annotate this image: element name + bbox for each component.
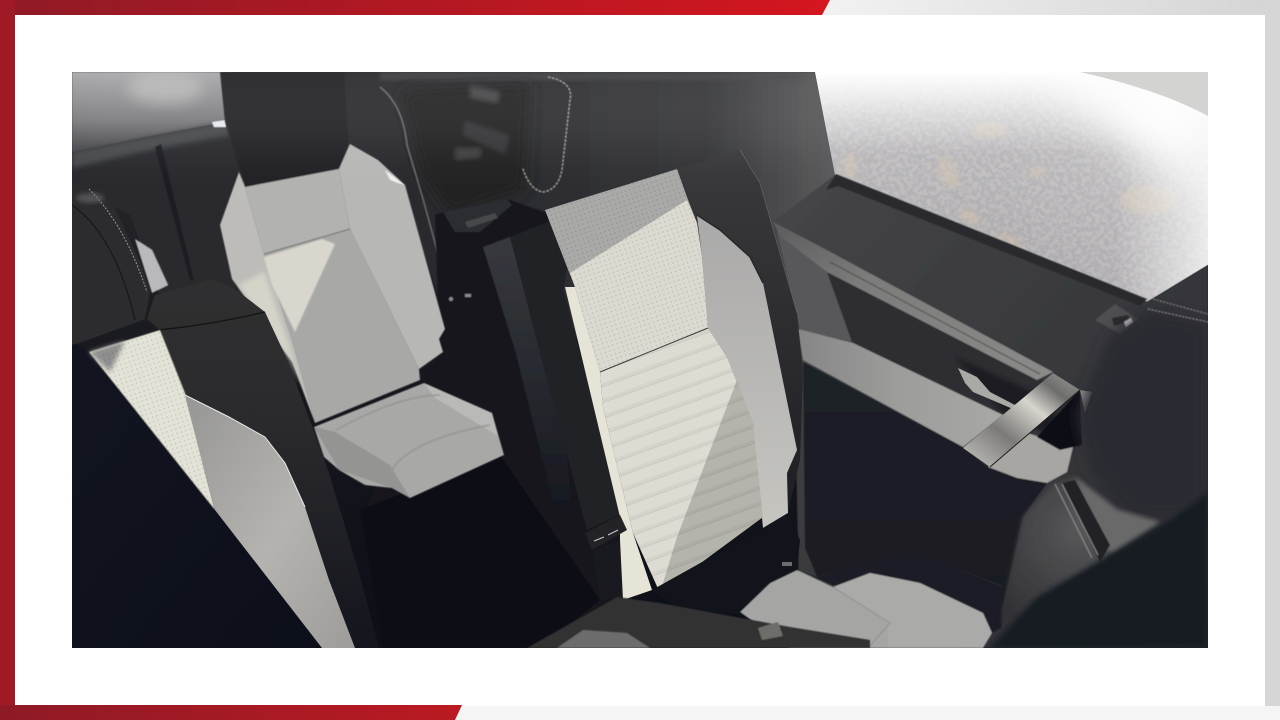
frame: grey right bar (1265, 0, 1280, 720)
white bolster (185, 395, 355, 648)
dark outer shell (728, 161, 803, 512)
headrest (220, 72, 350, 187)
door handle silver (958, 368, 1092, 467)
bottom right cushion (740, 550, 1003, 648)
seat side (1002, 477, 1160, 627)
front right seat (990, 299, 1208, 648)
upper back panel (245, 169, 350, 254)
bottom centre console (527, 597, 870, 648)
stitched dash curve (523, 77, 571, 192)
gravel speckle (828, 127, 1168, 301)
far rear seat (220, 72, 504, 498)
large dark foreground (1077, 309, 1208, 520)
door upper band (773, 222, 1053, 380)
quilted lower panel (600, 328, 763, 593)
perforated panel (89, 330, 215, 510)
frame: pale bottom bar (450, 706, 1280, 720)
photo base (72, 72, 1208, 648)
frame: red bottom bar (0, 705, 462, 720)
seat stitch stripe (1062, 480, 1110, 562)
tan patches (843, 122, 1180, 250)
soft light haze over photo top (60, 60, 840, 150)
seat cushion (314, 383, 504, 498)
door panel (773, 174, 1208, 648)
frame: red left bar (0, 0, 15, 720)
centre console and belt (360, 199, 576, 567)
door switch (1095, 304, 1138, 334)
roof wedge (1080, 72, 1208, 116)
bright left strip (565, 287, 652, 600)
door armrest end (988, 433, 1073, 483)
door recess (828, 273, 1074, 430)
front left seat (72, 184, 379, 648)
seatbelt (510, 210, 623, 530)
dark base (72, 342, 322, 648)
door armrest lower (798, 329, 1003, 447)
photo: car interior seats (60, 60, 1208, 648)
perforated upper panel (545, 169, 708, 372)
headrest (72, 184, 150, 345)
dark shoulder (147, 279, 379, 648)
upper-left hazy rear area (72, 72, 245, 296)
lower backrest (264, 229, 420, 423)
door lower pocket (803, 362, 1047, 607)
console markers (449, 297, 453, 301)
pillar below band (777, 232, 852, 342)
right bolster (339, 144, 445, 369)
belt buckle (585, 515, 627, 550)
window with gravel view (815, 72, 1208, 304)
main centre seat (510, 150, 803, 615)
outer bolster (220, 172, 315, 423)
frame: grey top bar (820, 0, 1280, 15)
window trim (826, 174, 1147, 306)
top-centre dark dash area (222, 72, 836, 400)
belt sheen strip (482, 237, 568, 466)
foot well block (657, 513, 800, 593)
right bolster (697, 215, 797, 528)
frame: red top bar (0, 0, 830, 15)
